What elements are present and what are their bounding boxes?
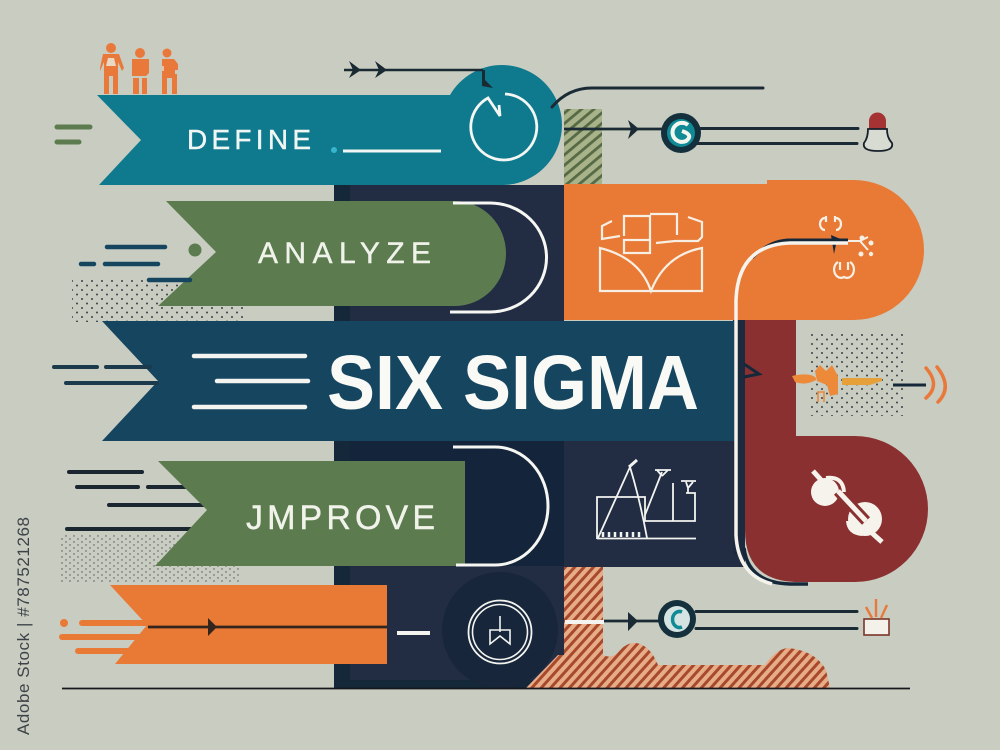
speed lines: improve (67, 472, 204, 529)
dotted texture: right (810, 334, 905, 416)
icon: timer ring (471, 94, 537, 160)
icon: connector node (752, 216, 874, 278)
speed lines: six sigma (54, 367, 157, 383)
arrow with node: upper (564, 113, 858, 153)
dotted texture: left lower (60, 535, 240, 583)
connector: navy curve under red block (744, 548, 808, 584)
speed lines: orange (60, 619, 146, 651)
arrow: top (344, 61, 493, 88)
arrow in banner (148, 618, 387, 636)
marker dot and rule (331, 147, 441, 153)
banner: analyze (158, 201, 547, 312)
icon: chart (597, 460, 696, 539)
panel: orange measure block (564, 180, 924, 320)
white arc (453, 447, 548, 565)
icon: signal arcs (893, 367, 945, 402)
dotted texture: left upper (72, 278, 245, 322)
dark gutter beside white connector (733, 320, 745, 555)
side credit text: Adobe Stock | #787521268 (14, 517, 33, 735)
label: improve: JMPROVE (246, 499, 435, 537)
arrow tip on connector (744, 364, 759, 377)
title: SIX SIGMA (327, 340, 699, 426)
arrow with node: lower (565, 600, 857, 638)
hatched wedge over dark column (526, 655, 564, 688)
icon: floor plan (600, 214, 702, 291)
circle: control badge (442, 572, 558, 688)
panel: red control block (745, 320, 928, 582)
hatched block: green (564, 109, 602, 185)
baseline rule (62, 688, 910, 690)
icon: three people (100, 43, 178, 94)
banner: improve (155, 447, 548, 566)
icon: valve (490, 616, 510, 644)
icon: orange tool on dots (792, 365, 882, 402)
icon: chain link (811, 471, 882, 542)
icon: box with sparks (864, 599, 889, 635)
dash (397, 631, 430, 635)
white arc (450, 203, 547, 312)
banner: six sigma (102, 321, 734, 441)
hatched hill: orange (564, 567, 830, 688)
central dark column (334, 185, 745, 688)
banner: define (97, 65, 562, 185)
connector: white line (736, 243, 848, 584)
speed lines: analyze (81, 244, 202, 280)
label: define: DEFINE (187, 124, 311, 155)
icon: person bust (864, 112, 892, 151)
speed lines: define (57, 127, 90, 142)
label: analyze: ANALYZE (258, 237, 431, 270)
speed lines in banner (194, 356, 308, 407)
connector: upper curve (552, 88, 763, 107)
banner: orange control (110, 585, 387, 664)
